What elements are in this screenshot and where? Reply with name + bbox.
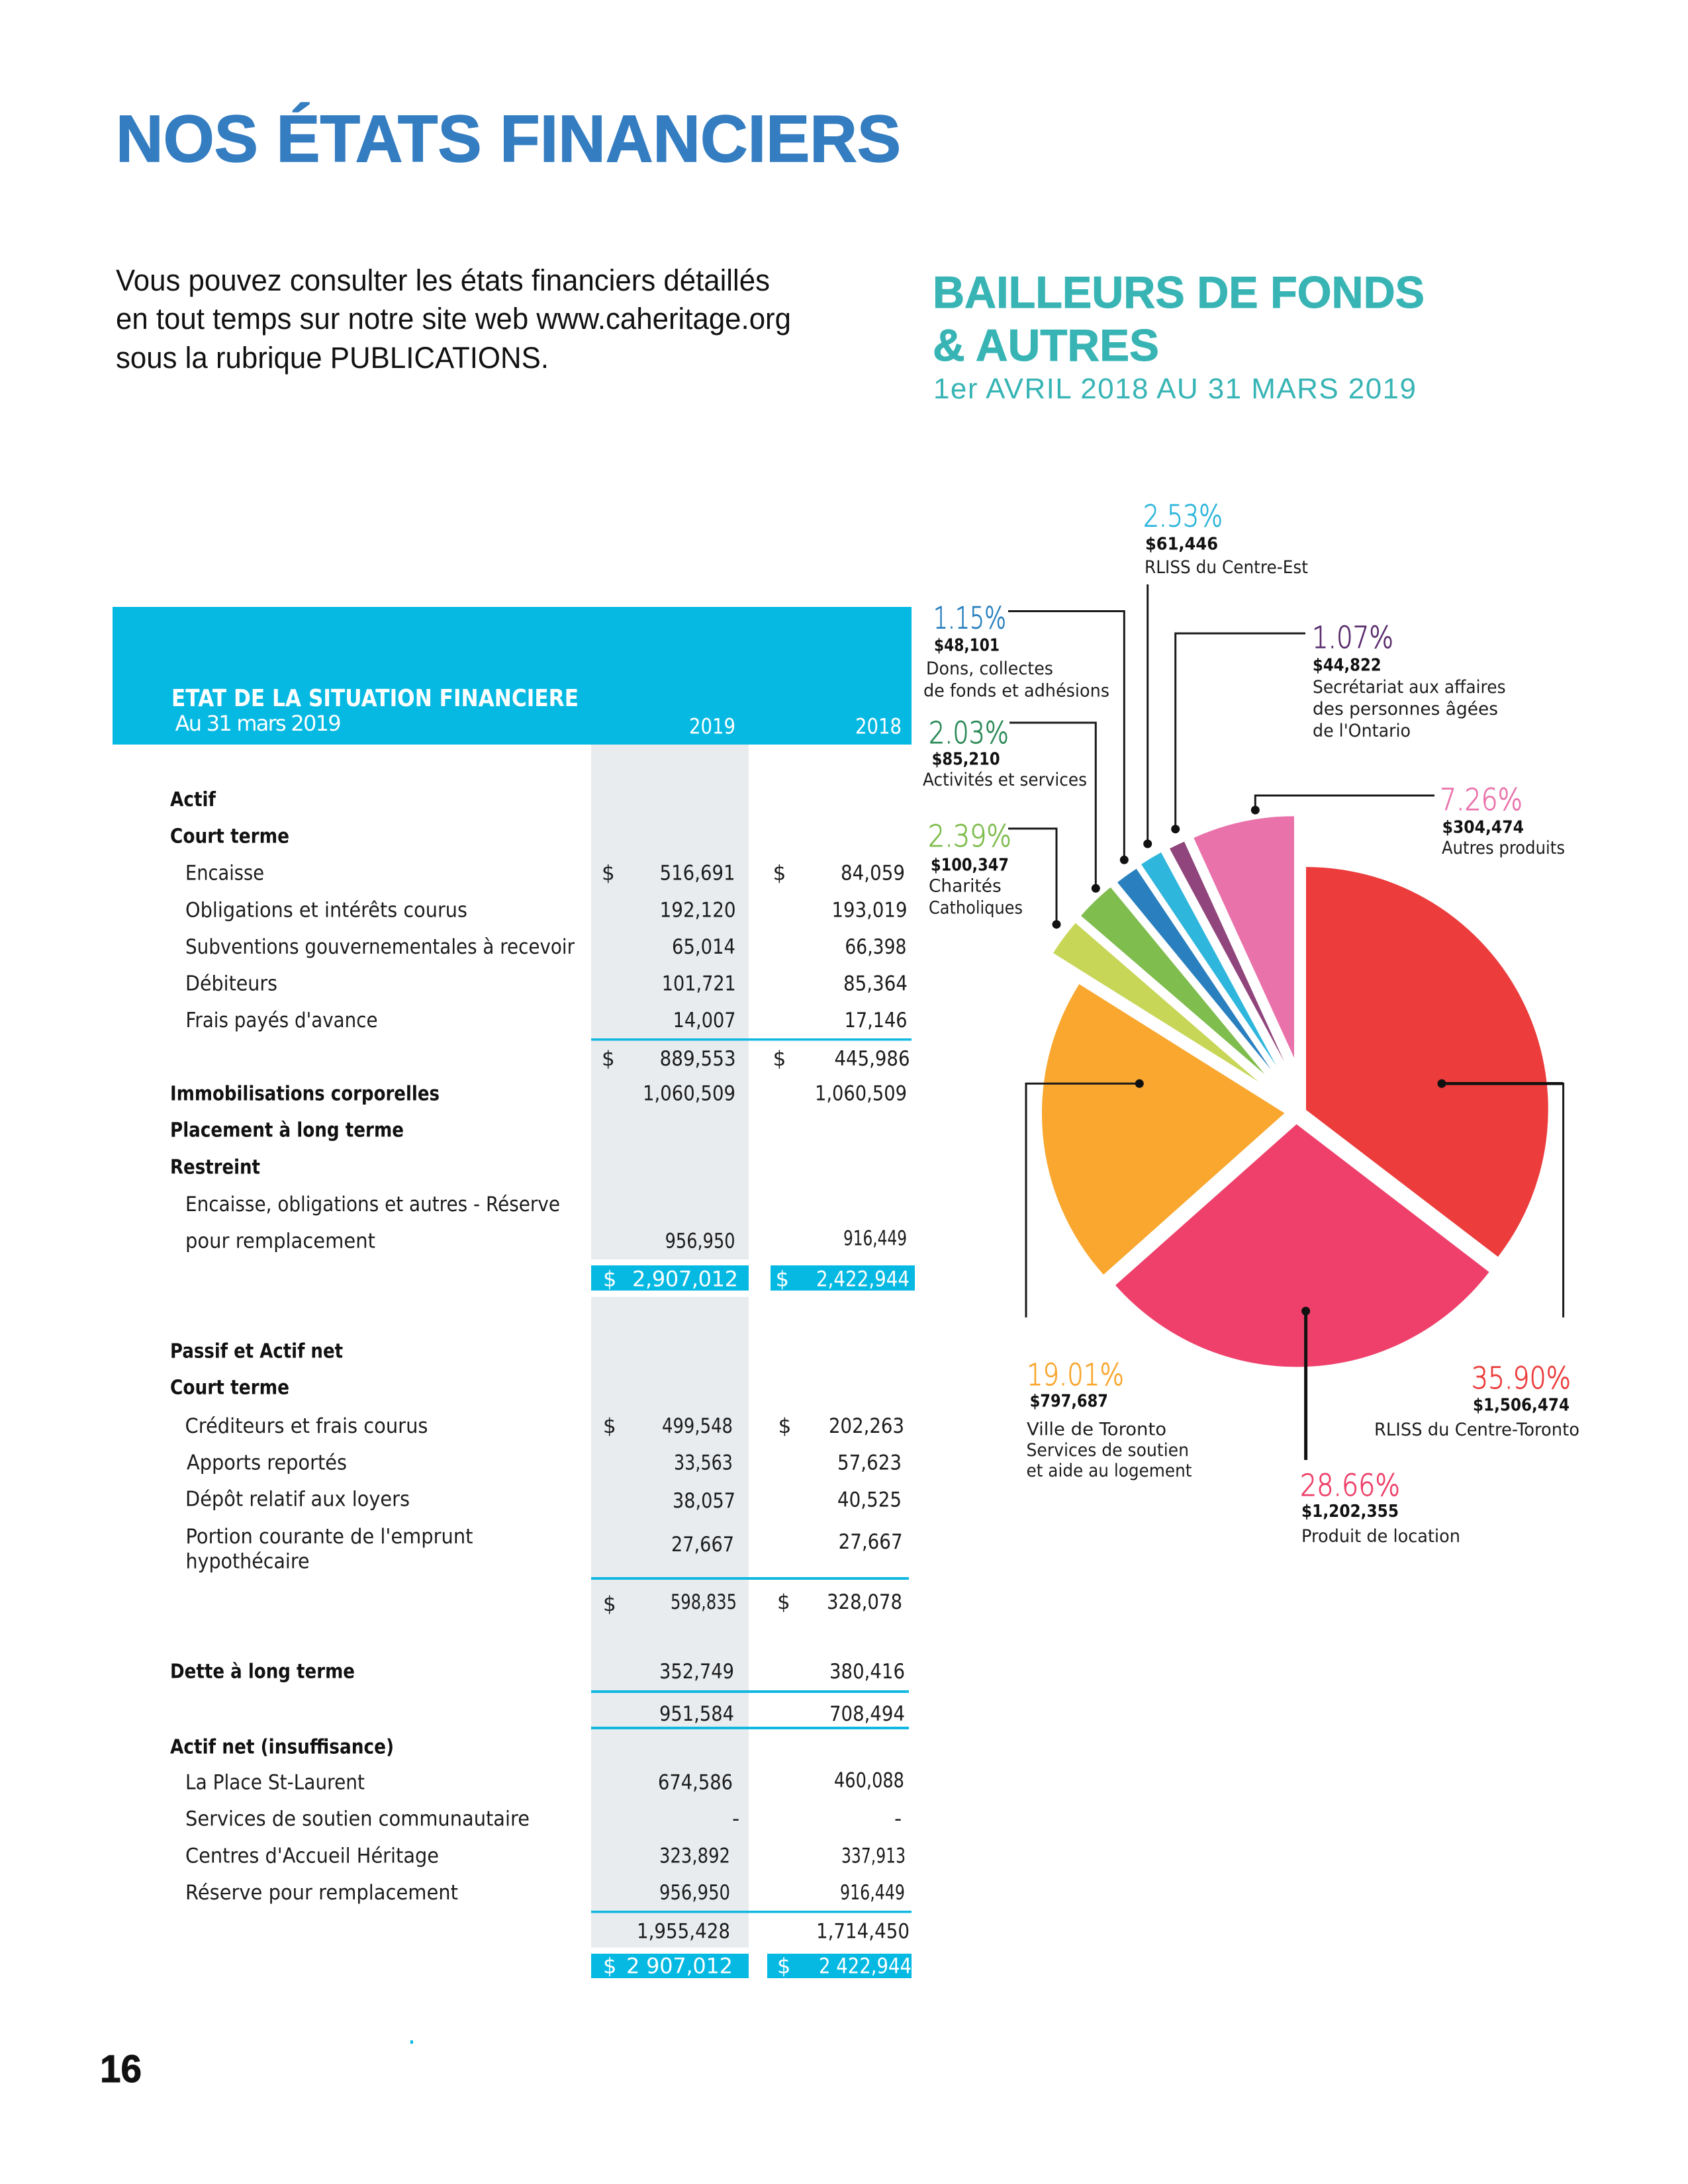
section: actif figures: 916,449 xyxy=(843,1227,907,1251)
intro paragraph: sous la rubrique PUBLICATIONS. xyxy=(116,341,549,375)
section: passif labels xyxy=(170,1340,530,1905)
section: passif figures: $ xyxy=(603,1954,616,1979)
callout: 19.01% xyxy=(1026,1357,1192,1481)
callout: 1.07%: de l'Ontario xyxy=(1313,721,1411,741)
leader lines xyxy=(1008,584,1564,1460)
section: passif figures: 951,584 xyxy=(659,1702,734,1726)
callout: 1.07%: Secrétariat aux affaires xyxy=(1313,677,1506,698)
callout: 2.53%: $61,446 xyxy=(1145,535,1218,555)
section: passif labels: Portion courante de l'emprunt xyxy=(185,1525,473,1549)
section: passif figures: $ xyxy=(603,1414,616,1438)
callout: 1.15%: de fonds et adhésions xyxy=(923,681,1109,702)
heading: bailleurs de fonds xyxy=(933,267,1425,405)
callout: 7.26%: Autres produits xyxy=(1442,838,1565,858)
callout: 1.07%: $44,822 xyxy=(1313,655,1382,675)
section: passif figures: 499,548 xyxy=(662,1414,733,1438)
rule lines and total bars xyxy=(591,1038,915,1978)
section: actif figures xyxy=(602,861,910,1292)
callout: 35.90% xyxy=(1374,1361,1579,1440)
callout: 2.53%: 2.53% xyxy=(1143,499,1223,533)
page number: 16 xyxy=(100,2048,142,2091)
section: actif figures: 14,007 xyxy=(673,1009,736,1032)
section: actif labels: Subventions gouvernementales à recevoir xyxy=(185,935,575,959)
section: actif figures: 516,691 xyxy=(660,861,735,885)
section: passif figures: 380,416 xyxy=(829,1660,905,1684)
callout: 2.39%: 2.39% xyxy=(928,819,1011,854)
callout: 7.26% xyxy=(1440,782,1565,858)
pie chart xyxy=(1042,816,1548,1367)
callout: 1.07% xyxy=(1312,620,1506,741)
section: passif labels: La Place St-Laurent xyxy=(185,1771,365,1795)
section: actif figures: 85,364 xyxy=(843,972,908,995)
callout: 7.26%: $304,474 xyxy=(1442,818,1524,838)
callout: 2.39%: Catholiques xyxy=(929,898,1023,919)
section: actif labels: Court terme xyxy=(170,825,289,848)
section: passif figures: 1,714,450 xyxy=(816,1920,910,1944)
callout: 2.03%: 2.03% xyxy=(929,715,1009,751)
table header band: ETAT DE LA SITUATION FINANCIERE xyxy=(171,685,579,712)
section: actif figures: 101,721 xyxy=(662,972,736,995)
section: actif labels xyxy=(170,788,575,1253)
section: passif figures: 40,525 xyxy=(837,1488,902,1512)
section: actif figures: 17,146 xyxy=(845,1009,908,1032)
callout: 28.66%: 28.66% xyxy=(1300,1468,1400,1503)
callout: 28.66%: $1,202,355 xyxy=(1301,1502,1399,1522)
shaded 2019 column xyxy=(591,745,749,1948)
section: actif figures: 193,019 xyxy=(831,899,907,923)
section: actif labels: Immobilisations corporelles xyxy=(170,1083,440,1106)
section: actif labels: Obligations et intérêts courus xyxy=(185,899,467,923)
section: passif labels: Passif et Actif net xyxy=(170,1340,343,1363)
section: actif labels: pour remplacement xyxy=(185,1230,375,1253)
callout: 1.15%: 1.15% xyxy=(933,601,1006,636)
callout: 1.07%: des personnes âgées xyxy=(1313,699,1498,719)
callout: 2.39%: Charités xyxy=(929,876,1002,897)
section: actif labels: Encaisse xyxy=(185,861,264,885)
section: actif labels: Débiteurs xyxy=(185,972,277,995)
callout: 1.15% xyxy=(923,601,1109,702)
section: actif figures: 1,060,509 xyxy=(815,1082,907,1106)
section: passif labels: Services de soutien communautaire xyxy=(185,1807,530,1831)
callout: 7.26%: 7.26% xyxy=(1440,782,1523,817)
section: actif labels: Actif xyxy=(170,788,216,811)
section: passif figures: 2 907,012 xyxy=(626,1954,733,1979)
section: passif figures: 708,494 xyxy=(829,1702,905,1726)
callout: 2.03%: $85,210 xyxy=(932,749,1000,769)
section: passif labels: Dépôt relatif aux loyers xyxy=(185,1488,410,1512)
callout: 2.03%: Activités et services xyxy=(923,770,1087,790)
callout: 1.15%: $48,101 xyxy=(934,635,1000,655)
section: actif labels: Restreint xyxy=(170,1156,260,1179)
section: passif figures: $ xyxy=(778,1414,791,1438)
section: passif labels: Dette à long terme xyxy=(170,1660,355,1684)
section: actif labels: Placement à long terme xyxy=(170,1118,404,1142)
section: actif figures: 84,059 xyxy=(841,861,905,885)
section: passif labels: Actif net (insuffisance) xyxy=(170,1735,394,1759)
table header band: 2018 xyxy=(855,713,902,739)
callout: 19.01%: et aide au logement xyxy=(1026,1461,1192,1481)
section: actif labels: Encaisse, obligations et autres - Réserve xyxy=(185,1193,560,1216)
section: actif figures: 2,422,944 xyxy=(816,1267,910,1292)
title: NOS ÉTATS FINANCIERS xyxy=(116,102,901,176)
callout: 35.90%: 35.90% xyxy=(1472,1361,1571,1396)
section: passif figures: 323,892 xyxy=(659,1844,730,1868)
section: actif figures: $ xyxy=(776,1267,789,1292)
callout: 2.03% xyxy=(923,715,1087,790)
section: actif figures: 2,907,012 xyxy=(632,1267,738,1292)
section: passif figures: 352,749 xyxy=(659,1660,734,1684)
section: actif figures: $ xyxy=(773,1047,786,1071)
callout: 2.39% xyxy=(928,819,1023,919)
section: passif labels: Apports reportés xyxy=(187,1451,347,1475)
section: passif figures: 33,563 xyxy=(674,1451,733,1475)
section: passif figures: 328,078 xyxy=(827,1590,902,1614)
section: actif figures: 889,553 xyxy=(660,1047,736,1071)
section: passif labels: Court terme xyxy=(170,1377,289,1400)
section: passif figures: $ xyxy=(777,1954,790,1979)
section: passif labels: hypothécaire xyxy=(185,1550,310,1574)
section: passif figures: 2 422,944 xyxy=(819,1954,912,1979)
section: passif labels: Réserve pour remplacement xyxy=(185,1881,458,1905)
section: actif figures: 445,986 xyxy=(834,1047,910,1071)
callout: 19.01%: $797,687 xyxy=(1030,1391,1108,1411)
section: passif figures: 956,950 xyxy=(659,1881,730,1905)
table header band: 2019 xyxy=(689,713,735,739)
section: passif figures: 674,586 xyxy=(658,1771,733,1795)
callout: 35.90%: RLISS du Centre-Toronto xyxy=(1374,1420,1579,1440)
section: actif labels: Frais payés d'avance xyxy=(185,1009,377,1032)
callout: 1.07%: 1.07% xyxy=(1312,620,1393,655)
section: passif labels: Créditeurs et frais courus xyxy=(185,1414,428,1438)
section: passif figures: 916,449 xyxy=(840,1881,905,1905)
panel: financial statement table xyxy=(113,607,915,1979)
callout: 1.15%: Dons, collectes xyxy=(926,659,1053,679)
section: passif figures: 598,835 xyxy=(671,1590,737,1614)
intro paragraph xyxy=(116,263,791,375)
callout: 28.66%: Produit de location xyxy=(1301,1526,1460,1547)
intro paragraph: Vous pouvez consulter les états financiers détaillés xyxy=(116,263,770,297)
section: passif figures: 38,057 xyxy=(673,1489,735,1513)
section: actif figures: 66,398 xyxy=(845,935,906,959)
table header band xyxy=(113,607,912,745)
section: actif figures: $ xyxy=(603,1267,616,1292)
section: actif figures: 192,120 xyxy=(660,899,736,923)
callout: 19.01%: Ville de Toronto xyxy=(1027,1420,1166,1440)
intro paragraph: en tout temps sur notre site web www.caheritage.org xyxy=(116,302,791,336)
heading: bailleurs de fonds: BAILLEURS DE FONDS xyxy=(933,267,1425,318)
section: actif figures: 1,060,509 xyxy=(643,1082,735,1106)
callout: 28.66% xyxy=(1300,1468,1460,1547)
callout: 2.39%: $100,347 xyxy=(931,855,1009,875)
table header band: Au 31 mars 2019 xyxy=(175,711,342,736)
callout: 2.53% xyxy=(1143,499,1308,578)
callout: 2.53%: RLISS du Centre-Est xyxy=(1145,557,1308,578)
heading: bailleurs de fonds: 1er AVRIL 2018 AU 31 MARS 2019 xyxy=(933,373,1416,405)
section: passif figures xyxy=(603,1414,912,1979)
section: passif figures: 27,667 xyxy=(839,1530,903,1554)
section: passif figures: 202,263 xyxy=(829,1414,904,1438)
section: passif figures: 1,955,428 xyxy=(637,1920,730,1944)
callout: 19.01%: 19.01% xyxy=(1027,1357,1124,1392)
section: passif figures: $ xyxy=(777,1590,790,1614)
section: actif figures: 65,014 xyxy=(672,935,735,959)
section: passif figures: 57,623 xyxy=(837,1451,902,1475)
section: passif figures: - xyxy=(732,1807,739,1831)
heading: bailleurs de fonds: & AUTRES xyxy=(933,320,1159,371)
section: passif figures: 460,088 xyxy=(834,1768,904,1792)
section: passif labels: Centres d'Accueil Héritage xyxy=(185,1844,439,1868)
section: passif figures: - xyxy=(894,1807,902,1831)
section: passif figures: 27,667 xyxy=(671,1533,734,1557)
callout: 19.01%: Services de soutien xyxy=(1026,1440,1189,1461)
section: actif figures: $ xyxy=(602,861,615,885)
callout: 35.90%: $1,506,474 xyxy=(1473,1395,1570,1415)
section: passif figures: 337,913 xyxy=(841,1844,906,1868)
section: actif figures: $ xyxy=(602,1047,615,1071)
section: actif figures: $ xyxy=(773,861,786,885)
section: passif figures: $ xyxy=(603,1592,616,1616)
section: actif figures: 956,950 xyxy=(665,1230,735,1253)
